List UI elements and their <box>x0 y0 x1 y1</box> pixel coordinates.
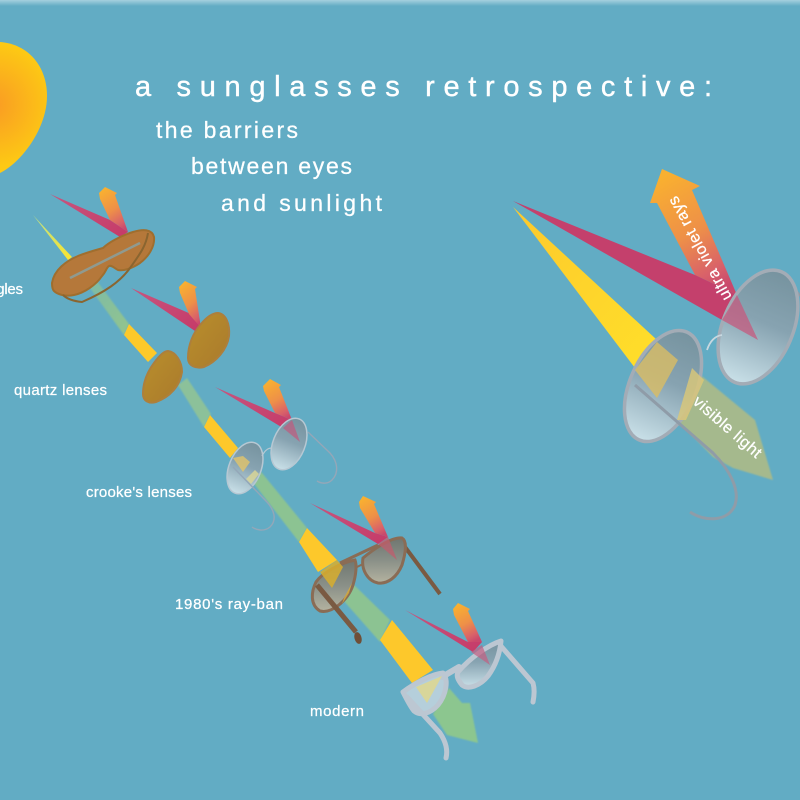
label: 1980's ray-ban: 1980's ray-ban <box>175 596 283 613</box>
enlarged diagram: large glasses <box>609 258 800 519</box>
subtitle: and sunlight <box>221 190 383 216</box>
quartz lenses <box>143 313 229 403</box>
enlarged diagram: yellow visible light wedge <box>513 207 657 368</box>
subtitle: between eyes <box>191 153 352 179</box>
top edge highlight <box>0 0 800 6</box>
label: visible light: visible light <box>689 393 765 462</box>
goggles rays <box>50 187 128 237</box>
label: modern: modern <box>310 703 364 720</box>
1980's ray-ban sunglasses <box>312 537 440 645</box>
ray-ban rays <box>310 496 388 544</box>
quartz rays <box>131 281 201 331</box>
modern sunglasses <box>403 641 534 758</box>
subtitle: the barriers <box>156 117 298 143</box>
modern rays <box>405 603 482 652</box>
crooke's rays <box>215 379 292 428</box>
enlarged diagram: ultra violet incoming wedge <box>513 201 737 320</box>
light beam passing through the five lenses <box>33 215 478 743</box>
goggles <box>52 230 154 302</box>
label: ultra violet rays: ultra violet rays <box>665 193 736 303</box>
label: quartz lenses: quartz lenses <box>14 382 107 399</box>
enlarged diagram: visible light arrow <box>677 368 773 480</box>
icon: sun <box>0 42 47 173</box>
subtitle <box>156 117 383 216</box>
enlarged diagram: ultra violet reflected arrow <box>650 169 737 295</box>
crooke's lenses <box>220 413 337 530</box>
title: a sunglasses retrospective: <box>135 71 712 103</box>
label: crooke's lenses: crooke's lenses <box>86 484 192 501</box>
